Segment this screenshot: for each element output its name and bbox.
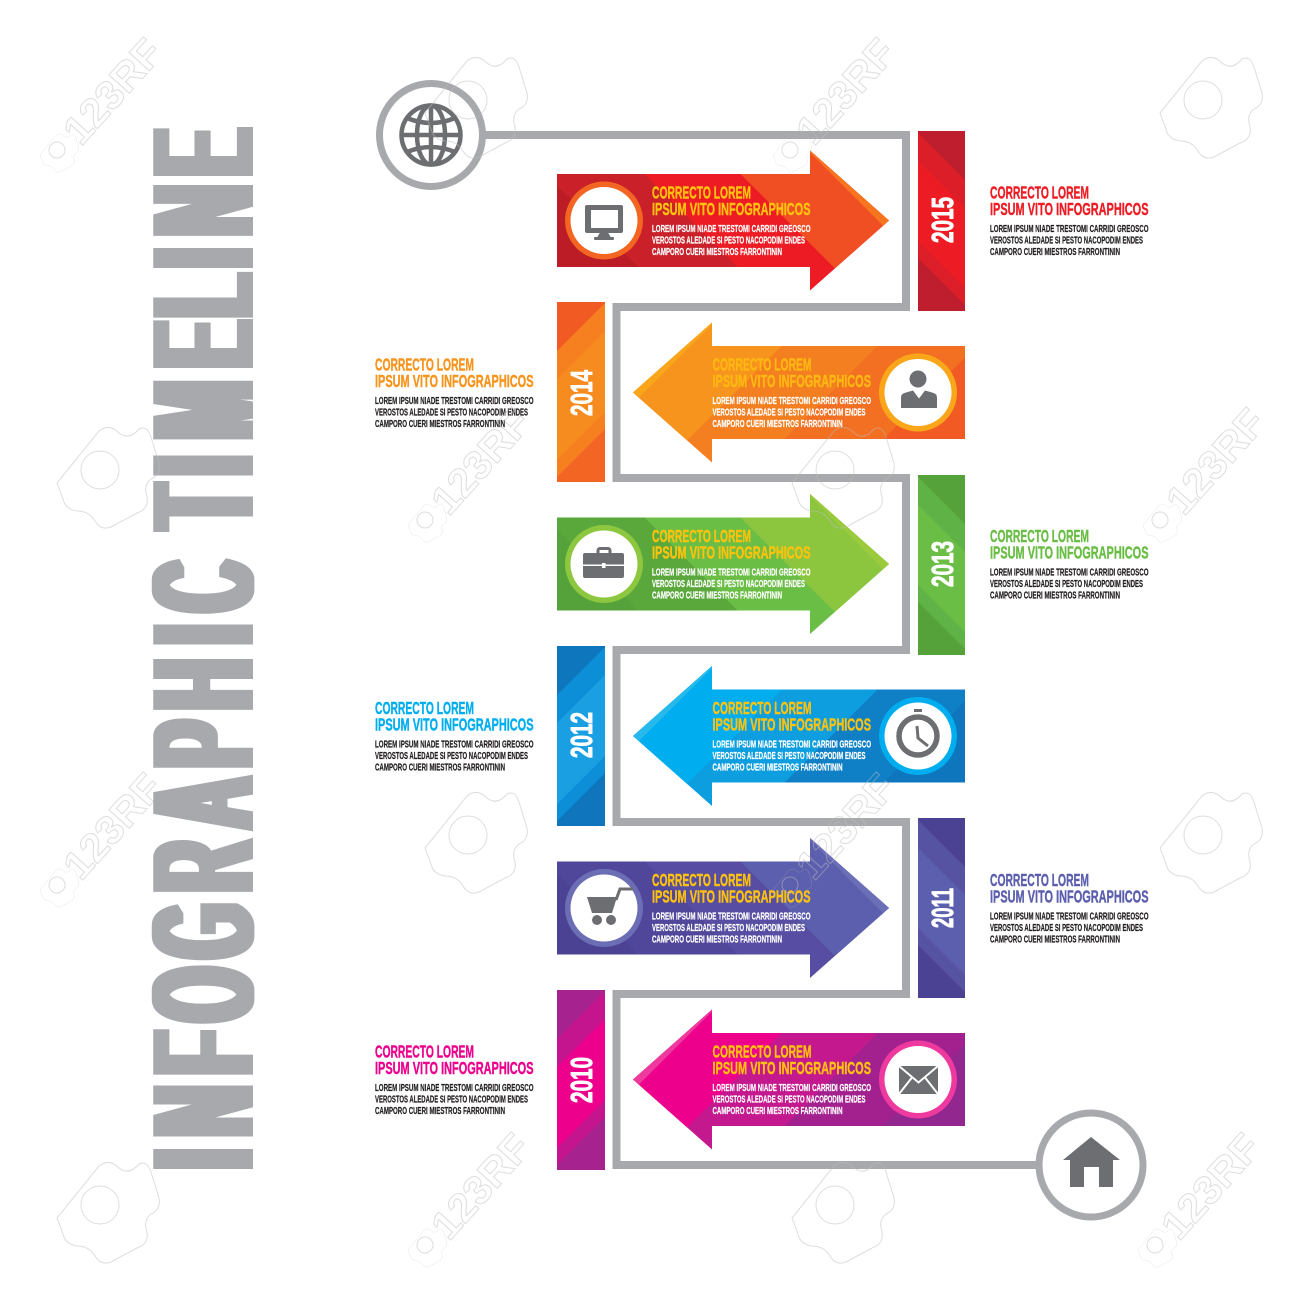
year bar: 2012 bbox=[557, 646, 605, 826]
label: 2014: IPSUM VITO INFOGRAPHICOS bbox=[375, 371, 534, 391]
arrow text: CORRECTO LOREM bbox=[712, 698, 812, 718]
label: 2013: VEROSTOS ALEDADE SI PESTO NACOPODIM ENDES bbox=[990, 579, 1143, 590]
label: 2012 bbox=[375, 698, 534, 774]
label: 2011: LOREM IPSUM NIADE TRESTOMI CARRIDI GREOSCO bbox=[990, 912, 1149, 922]
label: 2012: LOREM IPSUM NIADE TRESTOMI CARRIDI GREOSCO bbox=[375, 740, 534, 750]
year bar: 2010: 2010 bbox=[564, 1057, 599, 1103]
label: 2012: IPSUM VITO INFOGRAPHICOS bbox=[375, 714, 534, 734]
timeline connector line bbox=[480, 135, 1040, 1165]
arrow text: LOREM IPSUM NIADE TRESTOMI CARRIDI GREOSCO bbox=[712, 396, 871, 407]
label: 2012: CAMPORO CUERI MIESTROS FARRONTININ bbox=[375, 762, 505, 774]
year bar: 2015: 2015 bbox=[925, 197, 960, 243]
arrow text: IPSUM VITO INFOGRAPHICOS bbox=[712, 714, 871, 734]
title: INFOGRAPHIC TIMELINE bbox=[123, 129, 285, 1169]
year bar: 2014 bbox=[557, 302, 605, 482]
label: 2012: VEROSTOS ALEDADE SI PESTO NACOPODIM ENDES bbox=[375, 751, 528, 762]
label: 2015: CAMPORO CUERI MIESTROS FARRONTININ bbox=[990, 247, 1120, 258]
icon: briefcase bbox=[583, 548, 624, 578]
label: 2010: LOREM IPSUM NIADE TRESTOMI CARRIDI GREOSCO bbox=[375, 1083, 534, 1094]
arrow text: CAMPORO CUERI MIESTROS FARRONTININ bbox=[712, 419, 842, 430]
label: 2011: VEROSTOS ALEDADE SI PESTO NACOPODIM ENDES bbox=[990, 923, 1143, 934]
end node: home bbox=[1039, 1113, 1143, 1217]
arrow text: IPSUM VITO INFOGRAPHICOS bbox=[712, 371, 871, 391]
label: 2010: VEROSTOS ALEDADE SI PESTO NACOPODIM ENDES bbox=[375, 1094, 528, 1106]
year bar: 2012: 2012 bbox=[564, 712, 599, 758]
label: 2014: CORRECTO LOREM bbox=[375, 354, 474, 374]
label: 2014 bbox=[375, 354, 534, 430]
label: 2015: CORRECTO LOREM bbox=[990, 182, 1089, 202]
watermarks: 123RF bbox=[1153, 1126, 1269, 1248]
label: 2010: IPSUM VITO INFOGRAPHICOS bbox=[375, 1058, 534, 1078]
arrow text bbox=[712, 698, 871, 774]
label: 2015: VEROSTOS ALEDADE SI PESTO NACOPODIM ENDES bbox=[990, 236, 1143, 246]
arrow text: CAMPORO CUERI MIESTROS FARRONTININ bbox=[652, 247, 782, 258]
icon: person bbox=[901, 370, 937, 408]
arrow text: LOREM IPSUM NIADE TRESTOMI CARRIDI GREOSCO bbox=[712, 740, 871, 750]
arrow text: VEROSTOS ALEDADE SI PESTO NACOPODIM ENDES bbox=[712, 1094, 866, 1106]
arrow text bbox=[712, 1042, 871, 1117]
arrow: 2011 bbox=[557, 838, 889, 978]
watermarks: 123RF bbox=[423, 1126, 539, 1248]
label: 2013: IPSUM VITO INFOGRAPHICOS bbox=[990, 542, 1148, 562]
arrow text: IPSUM VITO INFOGRAPHICOS bbox=[652, 542, 810, 562]
year bar: 2011 bbox=[918, 818, 965, 998]
year bar: 2014: 2014 bbox=[564, 369, 599, 416]
arrow text bbox=[652, 870, 811, 946]
icon: monitor bbox=[585, 205, 623, 240]
watermarks: 123RF bbox=[55, 31, 171, 153]
arrow: 2013 bbox=[557, 494, 889, 634]
arrow text: IPSUM VITO INFOGRAPHICOS bbox=[652, 886, 810, 906]
watermarks: 123RF bbox=[1158, 401, 1274, 523]
label: 2010: CAMPORO CUERI MIESTROS FARRONTININ bbox=[375, 1106, 505, 1117]
label: 2011: CAMPORO CUERI MIESTROS FARRONTININ bbox=[990, 934, 1120, 946]
arrow text: CAMPORO CUERI MIESTROS FARRONTININ bbox=[652, 590, 782, 602]
arrow text: LOREM IPSUM NIADE TRESTOMI CARRIDI GREOSCO bbox=[712, 1083, 871, 1094]
label: 2010 bbox=[375, 1042, 534, 1117]
arrow text bbox=[652, 526, 811, 602]
watermarks: 123RF bbox=[423, 401, 539, 523]
arrow: 2015 bbox=[557, 150, 889, 290]
label: 2015 bbox=[990, 182, 1149, 258]
label: 2010: CORRECTO LOREM bbox=[375, 1042, 474, 1062]
arrow text: VEROSTOS ALEDADE SI PESTO NACOPODIM ENDES bbox=[652, 236, 805, 246]
watermarks: 123RF bbox=[788, 766, 904, 888]
label: 2014: CAMPORO CUERI MIESTROS FARRONTININ bbox=[375, 419, 505, 430]
icon: house bbox=[1063, 1137, 1120, 1187]
arrow text: LOREM IPSUM NIADE TRESTOMI CARRIDI GREOSCO bbox=[652, 224, 811, 235]
arrow text: CAMPORO CUERI MIESTROS FARRONTININ bbox=[712, 1106, 842, 1117]
arrow text: LOREM IPSUM NIADE TRESTOMI CARRIDI GREOSCO bbox=[652, 568, 811, 578]
arrow text bbox=[652, 182, 811, 258]
arrow text: IPSUM VITO INFOGRAPHICOS bbox=[652, 199, 810, 219]
label: 2011: CORRECTO LOREM bbox=[990, 870, 1089, 890]
arrow text: VEROSTOS ALEDADE SI PESTO NACOPODIM ENDES bbox=[712, 751, 866, 762]
label: 2015: LOREM IPSUM NIADE TRESTOMI CARRIDI GREOSCO bbox=[990, 224, 1149, 235]
label: 2013 bbox=[990, 526, 1149, 602]
year bar: 2013: 2013 bbox=[925, 541, 960, 587]
arrow text: VEROSTOS ALEDADE SI PESTO NACOPODIM ENDES bbox=[652, 579, 805, 590]
arrow text: CAMPORO CUERI MIESTROS FARRONTININ bbox=[652, 934, 782, 946]
arrow text: CORRECTO LOREM bbox=[652, 870, 751, 890]
label: 2011 bbox=[990, 870, 1149, 946]
start node: globe bbox=[380, 84, 482, 186]
icon: globe bbox=[401, 105, 461, 165]
arrow text: IPSUM VITO INFOGRAPHICOS bbox=[712, 1058, 871, 1078]
label: 2013: LOREM IPSUM NIADE TRESTOMI CARRIDI GREOSCO bbox=[990, 568, 1149, 578]
label: 2013: CORRECTO LOREM bbox=[990, 526, 1089, 546]
label: 2015: IPSUM VITO INFOGRAPHICOS bbox=[990, 199, 1148, 219]
arrow: 2012 bbox=[633, 666, 965, 806]
arrow text: VEROSTOS ALEDADE SI PESTO NACOPODIM ENDES bbox=[652, 923, 805, 934]
arrow text: CAMPORO CUERI MIESTROS FARRONTININ bbox=[712, 762, 842, 774]
label: 2014: LOREM IPSUM NIADE TRESTOMI CARRIDI GREOSCO bbox=[375, 396, 534, 407]
arrow: 2014 bbox=[633, 322, 965, 462]
label: 2014: VEROSTOS ALEDADE SI PESTO NACOPODIM ENDES bbox=[375, 408, 528, 418]
arrow text: LOREM IPSUM NIADE TRESTOMI CARRIDI GREOSCO bbox=[652, 912, 811, 922]
year bar: 2011: 2011 bbox=[925, 888, 960, 928]
arrow: 2010 bbox=[633, 1010, 965, 1150]
label: 2012: CORRECTO LOREM bbox=[375, 698, 474, 718]
year bar: 2010 bbox=[557, 990, 605, 1170]
watermarks: 123RF bbox=[55, 766, 171, 888]
label: 2011: IPSUM VITO INFOGRAPHICOS bbox=[990, 886, 1148, 906]
arrow text: CORRECTO LOREM bbox=[652, 526, 751, 546]
arrow text bbox=[712, 354, 871, 430]
icon: shopping cart bbox=[587, 889, 633, 925]
watermarks: 123RF bbox=[788, 31, 904, 153]
arrow text: CORRECTO LOREM bbox=[712, 1042, 812, 1062]
arrow text: VEROSTOS ALEDADE SI PESTO NACOPODIM ENDES bbox=[712, 408, 866, 418]
arrow text: CORRECTO LOREM bbox=[652, 182, 751, 202]
label: 2013: CAMPORO CUERI MIESTROS FARRONTININ bbox=[990, 590, 1120, 602]
year bar: 2013 bbox=[918, 475, 965, 655]
arrow text: CORRECTO LOREM bbox=[712, 354, 812, 374]
icon: stopwatch bbox=[899, 709, 937, 755]
icon: envelope bbox=[899, 1066, 938, 1094]
year bar: 2015 bbox=[918, 131, 965, 311]
